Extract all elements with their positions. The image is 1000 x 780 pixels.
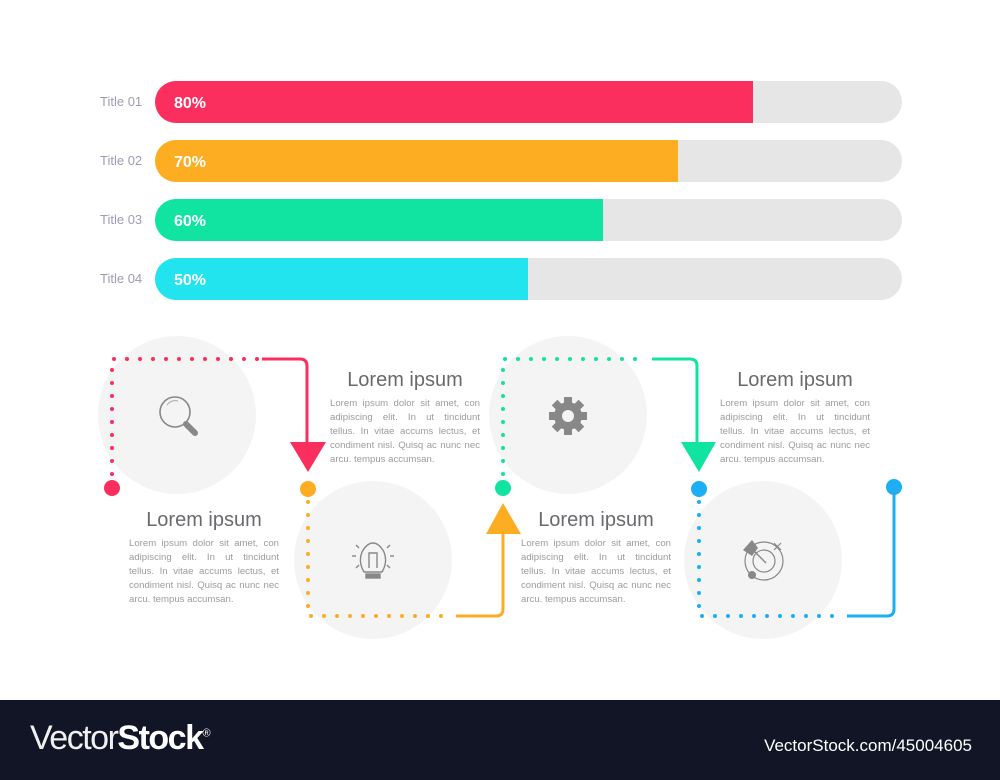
body: condiment nisl. Quisq ac nunc nec bbox=[720, 440, 870, 451]
icon: gear bbox=[549, 397, 587, 435]
body bbox=[129, 538, 279, 605]
body: adipiscing elit. In ut tincidunt bbox=[521, 552, 671, 563]
bar: Title 04 bbox=[155, 258, 902, 300]
icon: magnifier bbox=[160, 397, 195, 433]
bar: Title 02 bbox=[155, 140, 902, 182]
url: VectorStock.com/45004605 bbox=[764, 736, 972, 755]
heading: Lorem ipsum bbox=[737, 369, 853, 391]
body: Lorem ipsum dolor sit amet, con bbox=[521, 538, 671, 549]
body bbox=[521, 538, 671, 605]
arrow: orange bbox=[300, 481, 521, 616]
body: arcu. tempus accumsan. bbox=[129, 594, 234, 605]
body: arcu. tempus accumsan. bbox=[330, 454, 435, 465]
heading: Lorem ipsum bbox=[538, 509, 654, 531]
body: condiment nisl. Quisq ac nunc nec bbox=[330, 440, 480, 451]
icon: lightbulb bbox=[352, 543, 394, 578]
body: tellus. In vitae accums lectus, et bbox=[330, 426, 480, 437]
body: tellus. In vitae accums lectus, et bbox=[521, 566, 671, 577]
circles bbox=[98, 336, 842, 639]
arrow: blue bbox=[691, 479, 902, 616]
body: Lorem ipsum dolor sit amet, con bbox=[720, 398, 870, 409]
body: arcu. tempus accumsan. bbox=[521, 594, 626, 605]
bar: Title 03: 60% bbox=[174, 213, 206, 230]
body bbox=[330, 398, 480, 465]
body: tellus. In vitae accums lectus, et bbox=[720, 426, 870, 437]
body: condiment nisl. Quisq ac nunc nec bbox=[521, 580, 671, 591]
text block 4 bbox=[720, 369, 870, 465]
label: Title 03: Title 03 bbox=[100, 212, 142, 227]
icon: target dart bbox=[743, 540, 783, 580]
text block 3 bbox=[521, 509, 671, 605]
body: adipiscing elit. In ut tincidunt bbox=[330, 412, 480, 423]
bar: Title 04: 50% bbox=[174, 272, 206, 289]
body: condiment nisl. Quisq ac nunc nec bbox=[129, 580, 279, 591]
bar: Title 03 bbox=[155, 199, 902, 241]
text block 2 bbox=[129, 509, 279, 605]
body: adipiscing elit. In ut tincidunt bbox=[129, 552, 279, 563]
body: tellus. In vitae accums lectus, et bbox=[129, 566, 279, 577]
bar: Title 01 bbox=[155, 81, 902, 123]
label: Title 01: Title 01 bbox=[100, 94, 142, 109]
heading: Lorem ipsum bbox=[347, 369, 463, 391]
footer bbox=[0, 700, 1000, 780]
arrow: green bbox=[495, 359, 716, 496]
body: adipiscing elit. In ut tincidunt bbox=[720, 412, 870, 423]
body: Lorem ipsum dolor sit amet, con bbox=[129, 538, 279, 549]
body bbox=[720, 398, 870, 465]
heading: Lorem ipsum bbox=[146, 509, 262, 531]
bar: Title 01: 80% bbox=[174, 95, 206, 112]
body: Lorem ipsum dolor sit amet, con bbox=[330, 398, 480, 409]
bar: Title 02: 70% bbox=[174, 154, 206, 171]
arrow: pink bbox=[104, 359, 326, 496]
label: Title 02: Title 02 bbox=[100, 153, 142, 168]
label: Title 04: Title 04 bbox=[100, 271, 142, 286]
body: arcu. tempus accumsan. bbox=[720, 454, 825, 465]
logo: VectorStock® bbox=[30, 719, 209, 757]
text block 1 bbox=[330, 369, 480, 465]
